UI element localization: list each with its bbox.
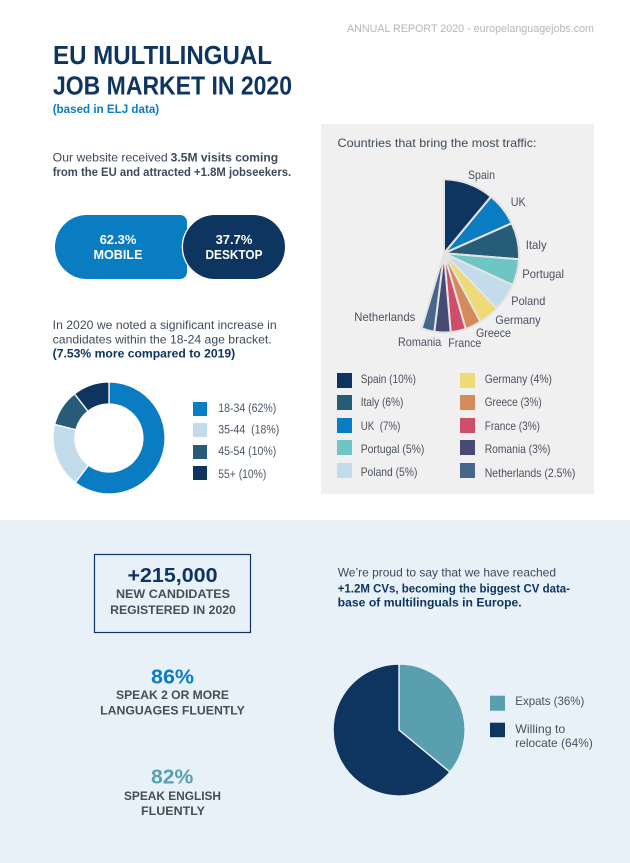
- text block: CV database: We’re proud to say that we have reached: [338, 566, 556, 580]
- stat box: new candidates: +215,000: [128, 565, 218, 587]
- pie slice labels: France: [448, 336, 482, 350]
- stat box: new candidates: REGISTERED IN 2020: [110, 603, 236, 617]
- stat: 86 percent: [100, 666, 245, 717]
- pie slice labels: Italy: [526, 238, 547, 252]
- stat: 82 percent: SPEAK ENGLISH: [124, 789, 221, 803]
- legend: countries: Poland (5%): [361, 465, 417, 479]
- pill: desktop: 37.7%: [216, 232, 253, 247]
- legend: expats: relocate (64%): [515, 736, 593, 750]
- stat: 86 percent: SPEAK 2 OR MORE: [116, 688, 229, 702]
- legend: countries: UK (7%): [361, 419, 400, 433]
- report header: ANNUAL REPORT 2020 - europelanguagejobs.com: [347, 23, 594, 35]
- legend: countries: Italy (6%): [361, 395, 403, 409]
- text block: website visits: 3.5M visits coming: [171, 150, 278, 164]
- legend: countries: France (3%): [485, 419, 540, 433]
- device split pills: [55, 215, 285, 279]
- legend: countries: [337, 372, 575, 480]
- legend: age groups: 35-44 (18%): [218, 424, 279, 436]
- panel: traffic by country: [321, 124, 594, 494]
- stat: 86 percent: LANGUAGES FLUENTLY: [100, 703, 245, 717]
- text block: website visits: [53, 150, 291, 179]
- legend: countries: Romania (3%): [485, 442, 550, 456]
- legend: expats: [490, 694, 593, 750]
- panel heading: Countries that bring the most traffic:: [338, 136, 536, 150]
- text block: age bracket: (7.53% more compared to 2019): [53, 347, 235, 361]
- fan pie chart: [422, 179, 519, 332]
- pie slice labels: Romania: [398, 335, 442, 349]
- pill: mobile: [55, 215, 187, 279]
- title: EU MULTILINGUAL: [53, 40, 272, 70]
- pill: mobile: MOBILE: [94, 247, 143, 262]
- legend: countries: Germany (4%): [485, 372, 552, 386]
- text block: CV database: +1.2M CVs, becoming the biggest CV data-: [338, 581, 570, 595]
- pie slice labels: Greece: [476, 326, 511, 340]
- legend: age groups: 45-54 (10%): [218, 446, 276, 458]
- legend: countries: Portugal (5%): [361, 442, 424, 456]
- legend: countries: Greece (3%): [485, 395, 542, 409]
- text block: age bracket: candidates within the 18-24 age bracket.: [53, 332, 272, 346]
- lower section background: [0, 520, 630, 863]
- legend: countries: Netherlands (2.5%): [485, 466, 575, 480]
- pie slice labels: Netherlands: [354, 310, 415, 324]
- stat: 86 percent: 86%: [151, 666, 194, 688]
- text block: age bracket: [53, 318, 277, 361]
- pie slice labels: UK: [511, 195, 526, 209]
- text block: website visits: Our website received: [53, 150, 168, 164]
- title: [53, 40, 292, 100]
- pill: desktop: DESKTOP: [206, 247, 263, 262]
- stat: 82 percent: [124, 766, 221, 818]
- legend: countries: Spain (10%): [361, 372, 416, 386]
- subtitle: (based in ELJ data): [53, 102, 159, 116]
- pie slice labels: Poland: [511, 294, 545, 308]
- title: JOB MARKET IN 2020: [53, 70, 292, 100]
- text block: CV database: [338, 566, 570, 610]
- pie slice labels: Spain: [468, 168, 495, 182]
- stat box: new candidates: [94, 554, 250, 632]
- donut chart: age groups: [53, 382, 165, 494]
- legend: expats: Expats (36%): [515, 694, 584, 708]
- pie chart: expats vs willing to relocate: [333, 664, 465, 796]
- legend: expats: Willing to: [515, 722, 566, 736]
- stat: 82 percent: FLUENTLY: [141, 804, 205, 818]
- pill: desktop: [183, 215, 285, 279]
- legend: age groups: 55+ (10%): [218, 469, 266, 481]
- text block: CV database: base of multilinguals in Europe.: [338, 596, 522, 610]
- legend: age groups: [193, 402, 279, 481]
- stat: 82 percent: 82%: [151, 766, 194, 788]
- legend: age groups: 18-34 (62%): [218, 403, 276, 415]
- text block: age bracket: In 2020 we noted a significant increase in: [53, 318, 277, 332]
- stat box: new candidates: NEW CANDIDATES: [116, 587, 230, 601]
- pie slice labels: [354, 168, 564, 350]
- pie slice labels: Germany: [495, 313, 541, 327]
- pill: mobile: 62.3%: [100, 232, 137, 247]
- text block: website visits: from the EU and attracted +1.8M jobseekers.: [53, 165, 291, 179]
- pie slice labels: Portugal: [522, 267, 564, 281]
